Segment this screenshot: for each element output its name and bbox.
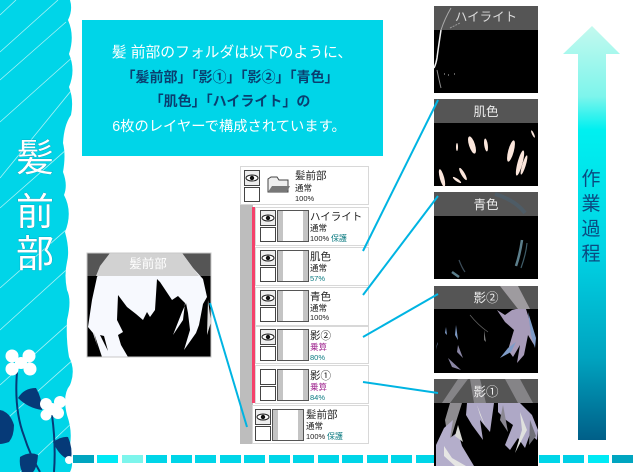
panel: 青色 layer: 青色 (473, 198, 499, 212)
panel: 髪前部 hair preview: 髪前部 (129, 256, 167, 271)
arrow: 作業過程: 作 (581, 168, 601, 190)
layer row: 髪前部: 100% (306, 432, 326, 441)
arrow: 作業過程: 過 (581, 218, 601, 240)
intro text panel (82, 20, 383, 156)
title: 髪前部: 髪 (16, 138, 54, 180)
arrow: 作業過程: 業 (581, 193, 601, 215)
layer row: ハイライト: ハイライト (310, 211, 362, 223)
layer row: 青色 (256, 288, 368, 326)
panel: ハイライト layer: ハイライト (455, 10, 517, 24)
title: 髪前部 (16, 138, 54, 276)
layer row: 影①: 乗算 (310, 382, 328, 392)
intro text panel: 「髪前部」「影①」「影②」「青色」 (122, 69, 338, 85)
title: 髪前部: 前 (16, 192, 54, 234)
panel: 影② layer: 影② (473, 291, 499, 305)
layer row: 髪前部: 保護 (327, 431, 343, 441)
layer row: 髪前部 (252, 406, 368, 444)
layer row: 影②: 80% (310, 353, 325, 362)
panel: layer list (240, 166, 368, 444)
panel: 影① layer (434, 379, 538, 466)
layer row: 髪前部: 通常 (306, 421, 323, 431)
arrow: 作業過程 (563, 26, 620, 440)
panel: ハイライト layer (434, 6, 538, 93)
layer row: 影②: 乗算 (310, 342, 328, 352)
layer row: 髪前部: 髪前部 (306, 408, 338, 421)
layer row: 青色: 通常 (310, 303, 327, 313)
layer row: 影②: 影② (310, 330, 331, 342)
panel: 影① layer: 影① (473, 385, 499, 399)
panel: 肌色 layer: 肌色 (473, 105, 499, 119)
layer row: 青色: 100% (310, 313, 330, 322)
panel: 肌色 layer (434, 99, 538, 187)
layer row: folder: 髪前部 (295, 169, 327, 182)
layer row: ハイライト: 保護 (331, 233, 347, 243)
arrow: 作業過程: 程 (581, 243, 601, 265)
layer row: 影① (256, 366, 368, 404)
panel: 影② layer (434, 286, 538, 373)
layer row: 影② (256, 326, 368, 364)
layer row: folder (240, 166, 368, 204)
intro text panel: 6枚のレイヤーで構成されています。 (112, 118, 346, 135)
layer row: 青色: 青色 (310, 290, 331, 303)
sidebar with scalloped edge (0, 0, 75, 472)
layer row: ハイライト: 通常 (310, 223, 327, 233)
panel: 髪前部 hair preview (87, 253, 211, 357)
footer squares (73, 455, 633, 463)
layer row: 肌色 (256, 248, 368, 286)
intro text panel: 髪 前部のフォルダは以下のように、 (112, 44, 352, 61)
layer row: 影①: 影① (310, 370, 331, 382)
layer row: 肌色: 肌色 (310, 251, 331, 263)
panel: 青色 layer (434, 192, 538, 279)
layer row: 肌色: 57% (310, 274, 325, 283)
icon: flowers and leaves (0, 350, 73, 472)
layer row: folder: 100% (295, 194, 315, 203)
layer row: 肌色: 通常 (310, 263, 327, 273)
layer row: ハイライト: 100% (310, 234, 330, 243)
layer row: ハイライト (256, 208, 368, 246)
layer row: folder: 通常 (295, 183, 312, 193)
title: 髪前部: 部 (16, 234, 54, 276)
layer row: 影①: 84% (310, 393, 325, 402)
connector lines (210, 100, 438, 427)
intro text panel: 「肌色」「ハイライト」の (150, 93, 310, 109)
